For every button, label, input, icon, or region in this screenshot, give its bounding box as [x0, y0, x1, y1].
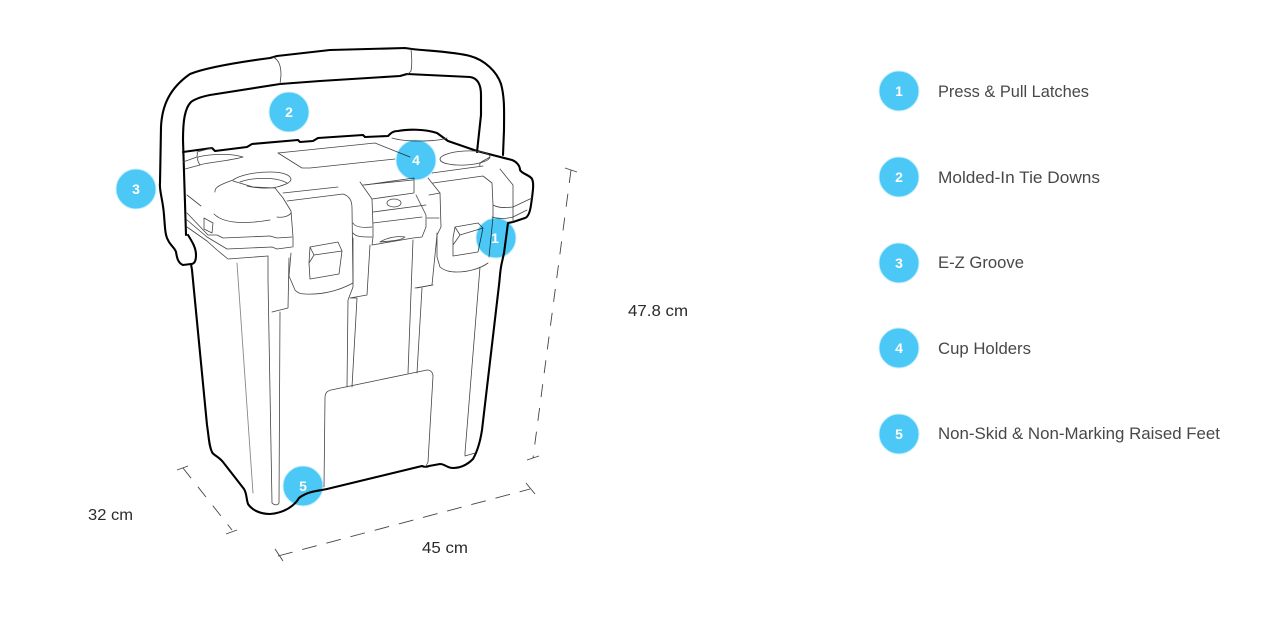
legend [879, 71, 1220, 454]
marker 4: 4 [412, 152, 420, 168]
label: depth: 32 cm [88, 507, 133, 524]
legend item 1: Press & Pull Latches [938, 82, 1089, 101]
legend item 4 [879, 328, 1031, 368]
icon: left latch button [309, 242, 342, 279]
dimension: depth line [177, 466, 237, 534]
legend item 4: 4 [895, 340, 903, 356]
cooler illustration [160, 48, 533, 514]
legend item 2 [879, 157, 1100, 197]
body panel lines [237, 238, 480, 505]
lid details [183, 138, 532, 259]
label: height: 47.8 cm [628, 303, 688, 320]
legend item 5: Non-Skid & Non-Marking Raised Feet [938, 424, 1220, 443]
marker 2: 2 [285, 104, 293, 120]
legend item 5: 5 [895, 426, 903, 442]
legend item 1: 1 [895, 83, 903, 99]
cooler body outline [183, 130, 533, 514]
legend item 1 [879, 71, 1089, 111]
marker 1 [476, 218, 516, 258]
marker 3 [116, 169, 156, 209]
dimension: width line [275, 483, 535, 561]
legend item 3 [879, 243, 1024, 283]
cooler handle [160, 48, 504, 265]
legend item 5 [879, 414, 1220, 454]
marker 2 [269, 92, 309, 132]
label: width: 45 cm [422, 540, 468, 557]
legend item 2: 2 [895, 169, 903, 185]
latches and straps [287, 178, 488, 294]
legend item 3: 3 [895, 255, 903, 271]
dimension: height line [527, 168, 577, 460]
marker 5 [283, 466, 323, 506]
marker 5: 5 [299, 478, 307, 494]
legend item 2: Molded-In Tie Downs [938, 168, 1100, 187]
foot panel [324, 370, 433, 487]
legend item 4: Cup Holders [938, 339, 1031, 358]
marker 4 [396, 140, 436, 180]
marker 3: 3 [132, 181, 140, 197]
icon: right latch button [453, 223, 483, 256]
marker 1: 1 [491, 230, 499, 246]
legend item 3: E-Z Groove [938, 253, 1024, 272]
